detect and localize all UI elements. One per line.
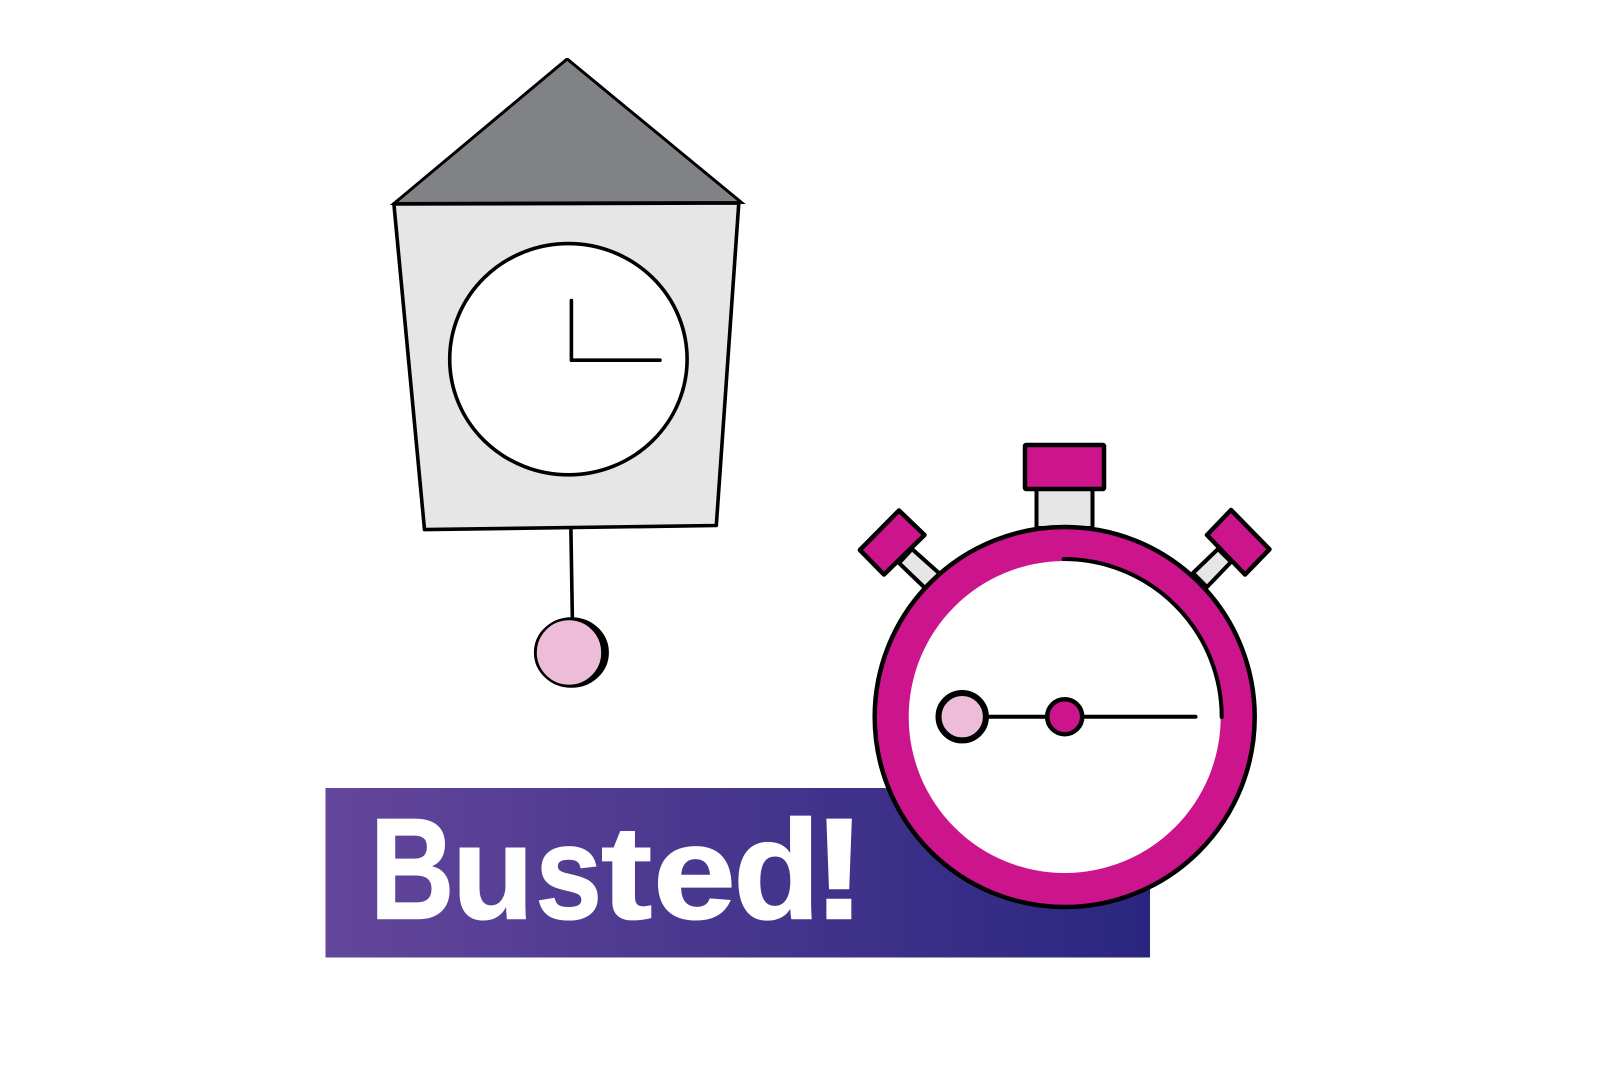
banner heading: s [535,800,602,948]
stopwatch hand [980,715,1196,719]
stopwatch top button [1025,445,1104,489]
banner heading: u [452,800,534,948]
icon: stopwatch [860,445,1270,907]
banner background [326,788,1150,958]
banner heading: t [601,800,652,948]
clock pendulum bob [535,619,607,686]
stopwatch progress arc [1064,559,1222,717]
stopwatch left button [860,510,940,588]
clock body [394,203,739,530]
stopwatch hand counterweight [938,693,986,740]
banner heading: ! [812,788,867,950]
stopwatch right button [1193,510,1270,587]
banner heading: B [370,788,454,950]
clock roof [394,60,742,204]
clock face [450,244,687,475]
banner: Busted! [326,788,1150,958]
banner heading: d [733,790,820,948]
stopwatch case [875,527,1255,907]
icon: cuckoo clock [394,60,742,686]
stopwatch top stem [1036,484,1092,528]
banner heading: e [653,800,736,948]
stopwatch hand pivot [1047,699,1082,734]
clock pendulum rod [571,529,572,621]
clock hands [571,300,660,360]
stopwatch dial [909,561,1221,873]
